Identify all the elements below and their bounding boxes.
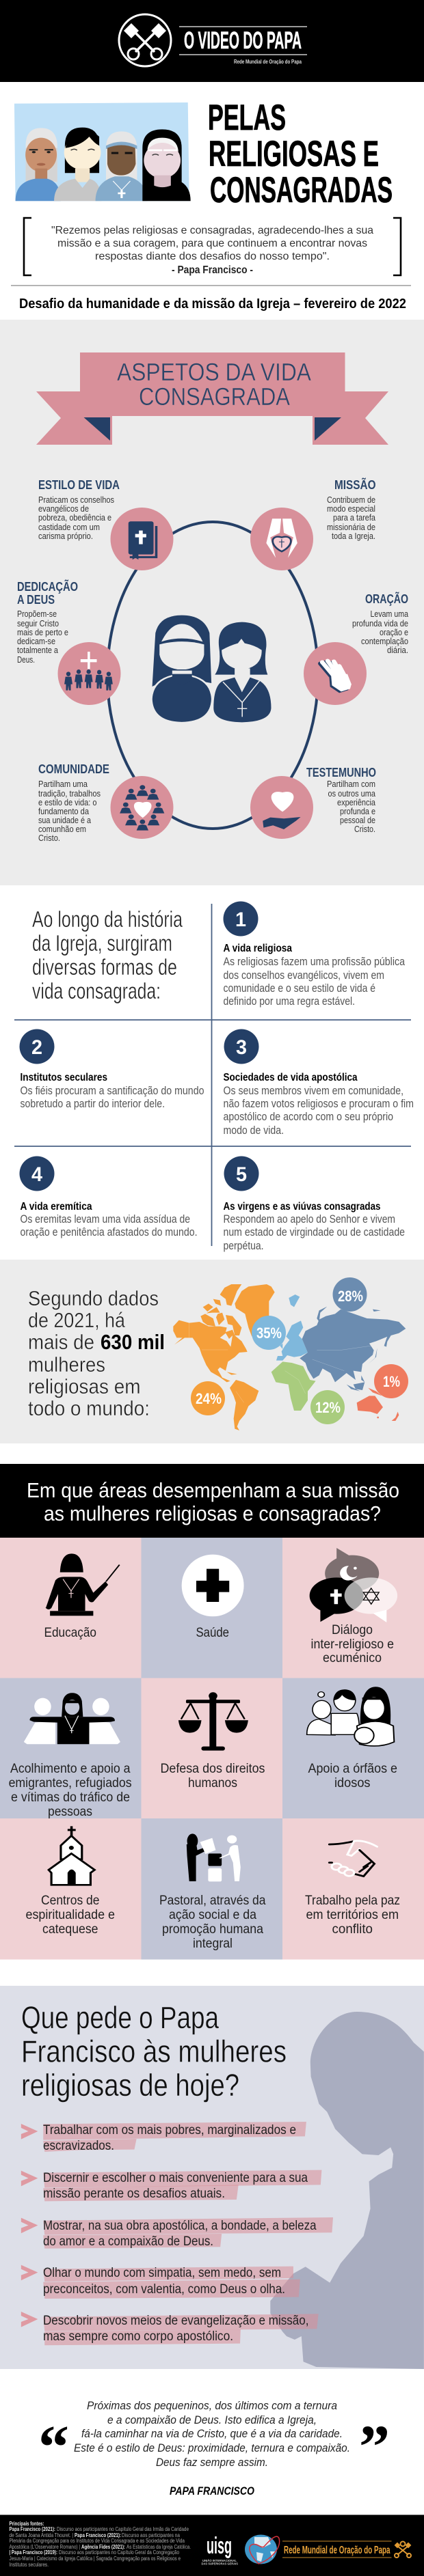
label: orfaos: Apoio a órfãos e <box>308 1762 397 1776</box>
label: espiritualidade <box>26 1894 115 1937</box>
icon: saude <box>182 1555 244 1616</box>
aspect: testemunho: Partilham com <box>327 779 375 789</box>
logo: UISG <box>201 2533 238 2566</box>
list of requests <box>43 2123 317 2344</box>
label: acolhimento: pessoas <box>48 1805 92 1819</box>
form 1: comunidade e o seu estilo de vida é <box>223 982 375 995</box>
aspect: estilo de vida: pobreza, obediência e <box>38 513 111 523</box>
form 5: Respondem ao apelo do Senhor e vivem <box>223 1213 395 1225</box>
label: orfaos <box>308 1762 397 1790</box>
logo: UISG: DAS SUPERIORAS GERAIS <box>201 2562 238 2566</box>
aspect: comunidade: COMUNIDADE <box>38 762 109 776</box>
form 1 <box>223 902 406 1008</box>
label: acolhimento <box>9 1762 132 1819</box>
label: paz <box>305 1894 400 1937</box>
icon: acolhimento <box>24 1693 120 1744</box>
aspect: comunidade: sua unidade é a <box>38 816 91 825</box>
form 1: dos conselhos evangélicos, vivem em <box>223 969 384 982</box>
form 2: 2 <box>31 1036 42 1059</box>
aspect: estilo de vida: ESTILO DE VIDA <box>38 477 120 492</box>
banner <box>36 352 388 445</box>
form 1: definido por uma regra estável. <box>223 995 355 1008</box>
intro text: Ao longo da história <box>32 906 183 932</box>
form 2: Os fiéis procuram a santificação do mundo <box>21 1085 204 1097</box>
label: pastoral <box>159 1894 266 1951</box>
form 3: apostólico de acordo com o seu próprio <box>223 1111 393 1123</box>
statistic text: 630 mil <box>101 1330 165 1354</box>
label: dialogo: ecuménico <box>323 1651 382 1665</box>
quote in brackets <box>24 218 401 276</box>
aspect: estilo de vida: Praticam os conselhos <box>38 495 114 505</box>
label: pastoral: Pastoral, através da <box>159 1894 266 1908</box>
sources: Jesus-Maria | Catecismo da Igreja Católica | Sagrada Congregação para os Religiosos e <box>10 2556 181 2562</box>
form 4: A vida eremítica <box>21 1201 92 1213</box>
icon: balanca <box>178 1692 248 1751</box>
closing quote: PAPA FRANCISCO <box>170 2484 254 2497</box>
aspect: estilo de vida: castidade com um <box>38 523 100 532</box>
heading band: areas de missao <box>0 1464 424 1538</box>
title: PELAS <box>208 98 286 138</box>
form 5: As virgens e as viúvas consagradas <box>223 1201 381 1213</box>
sources: Plenária da Congregação para os Institutos de Vida Consagrada e as Sociedades de Vida <box>10 2538 185 2544</box>
aspect: estilo de vida: evangélicos de <box>38 504 89 514</box>
label: saude: Saúde <box>196 1626 229 1640</box>
form 3: modo de vida. <box>223 1124 284 1137</box>
aspect: testemunho: os outros uma <box>328 789 375 799</box>
ring connecting aspects <box>107 522 318 829</box>
closing quote: Próximas dos pequeninos, dos últimos com a ternura <box>87 2399 337 2412</box>
list of requests: Descobrir novos meios de evangelização e missão, <box>43 2314 309 2328</box>
icon: two women centre <box>151 615 271 723</box>
label: paz: conflito <box>332 1922 373 1937</box>
footer <box>0 2515 424 2576</box>
label: paz: Trabalho pela paz <box>305 1894 400 1908</box>
map percentages: 24% <box>196 1390 222 1407</box>
label: orfaos: idosos <box>334 1776 371 1790</box>
aspect: oracao: oração e <box>380 628 408 637</box>
aspect: testemunho: Cristo. <box>354 825 375 834</box>
closing quote: e a compaixão de Deus. Isto edifica a Igreja, <box>107 2413 317 2426</box>
statistic text: religiosas em <box>28 1374 141 1398</box>
label: pastoral: integral <box>193 1937 233 1951</box>
aspect: dedicacao a Deus: A DEUS <box>17 592 55 607</box>
aspect: dedicacao a Deus: totalmente a <box>17 646 58 655</box>
label: direitos humanos: humanos <box>188 1776 237 1790</box>
aspect: dedicacao a Deus: DEDICAÇÃO <box>17 579 78 594</box>
logo: rede mundial <box>282 2541 411 2558</box>
label: dialogo <box>310 1623 394 1665</box>
quote in brackets: respostas diante dos desafios do nosso tempo". <box>95 251 330 262</box>
sources: Papa Francisco (2021): <box>75 2532 121 2538</box>
label: espiritualidade: catequese <box>42 1922 98 1937</box>
list of requests: escravizados. <box>43 2139 114 2153</box>
icon: dialogo inter-religioso <box>310 1548 397 1622</box>
aspect: dedicacao a Deus: seguir Cristo <box>17 619 59 628</box>
closing quote: Deus faz sempre assim. <box>156 2456 268 2469</box>
form 4: Os eremitas levam uma vida assídua de <box>21 1213 190 1225</box>
sources <box>10 2521 191 2568</box>
heading: religiosas de hoje? <box>21 2068 239 2103</box>
sources: Papa Francisco (2021): <box>10 2526 55 2532</box>
icon: pastoral <box>187 1833 241 1881</box>
aspect: missao: MISSÃO <box>334 477 376 492</box>
aspect: testemunho: profunda e <box>340 807 375 816</box>
aspect: oracao: profunda vida de <box>352 619 408 628</box>
aspect: oracao: ORAÇÃO <box>365 592 408 606</box>
sources: de Santa Joana Antida Thouret. | <box>10 2532 73 2538</box>
icon: igreja <box>49 1826 94 1885</box>
heading band: areas de missao: as mulheres religiosas e consagradas? <box>44 1501 381 1525</box>
form 2: sobretudo a partir do interior dele. <box>21 1098 165 1110</box>
aspect: dedicacao a Deus: mais de perto e <box>17 628 68 637</box>
statistic text: de 2021, há <box>28 1308 126 1332</box>
closing quote: fá-la caminhar na via de Cristo, que é a via da caridade. <box>81 2427 343 2440</box>
aspect: missao: modo especial <box>327 504 375 514</box>
label: acolhimento: Acolhimento e apoio a <box>10 1762 131 1776</box>
aspect: comunidade: Cristo. <box>38 833 60 843</box>
quote marks: ” <box>359 2413 390 2481</box>
list of requests: preconceitos, com valentia, como Deus o olha. <box>43 2282 285 2297</box>
label: dialogo: Diálogo <box>332 1623 373 1637</box>
aspect: oracao: contemplação <box>361 637 408 646</box>
aspect: dedicacao a Deus: dedicam-se <box>17 637 55 646</box>
form 1: A vida religiosa <box>223 943 292 954</box>
icon: aperto de maos <box>329 1841 377 1876</box>
aspect: missao: Contribuem de <box>327 495 375 505</box>
intro text: vida consagrada: <box>32 978 161 1003</box>
heading band: areas de missao: Em que áreas desempenham a sua missão <box>27 1478 399 1502</box>
closing quote <box>38 2399 390 2497</box>
aspect: comunidade: tradição, trabalhos <box>38 789 101 799</box>
label: direitos humanos: Defesa dos direitos <box>160 1762 265 1776</box>
aspect: comunidade <box>38 762 174 843</box>
form 2 <box>19 1029 204 1110</box>
map percentages: 1% <box>383 1373 400 1390</box>
statistic text <box>28 1286 165 1420</box>
aspect: comunidade: e estilo de vida: o <box>38 798 97 807</box>
quote marks <box>38 2413 390 2481</box>
list of requests: mas sempre como corpo apostólico. <box>43 2329 233 2344</box>
form 4: oração e penitência afastados do mundo. <box>21 1226 197 1238</box>
aspect: missao: para a tarefa <box>333 513 375 523</box>
panel: grid of mission areas <box>0 1538 424 1959</box>
sources: | Papa Francisco (2019): <box>10 2549 57 2556</box>
wordmark: Rede Mundial de Oração do Papa <box>234 59 302 65</box>
list of requests: Mostrar, na sua obra apostólica, a bondade, a beleza <box>43 2219 317 2233</box>
panel: formas de vida consagrada <box>14 902 414 1252</box>
statistic text: todo o mundo: <box>28 1396 150 1420</box>
aspect: testemunho: experiência <box>337 798 375 807</box>
sources: Institutos seculares. <box>10 2562 49 2568</box>
wordmark <box>179 27 307 65</box>
form 4: 4 <box>31 1163 42 1186</box>
title <box>208 98 393 210</box>
quote in brackets: "Rezemos pelas religiosas e consagradas, agradecendo-lhes a sua <box>51 225 373 236</box>
logo: globe with heart <box>245 2534 280 2564</box>
logo: UISG: uisg <box>207 2533 232 2559</box>
world map <box>173 1284 406 1430</box>
list of requests: missão perante os desafios atuais. <box>43 2187 225 2201</box>
form 2: Institutos seculares <box>21 1072 107 1083</box>
aspect: oracao: Levam uma <box>371 609 408 619</box>
map percentages <box>191 1277 408 1424</box>
sources: Apostólica (L'Osservatore Romano) | <box>10 2544 80 2550</box>
label: espiritualidade: Centros de <box>41 1894 100 1908</box>
aspect: comunidade: Partilham uma <box>38 779 88 789</box>
sources: Discurso aos participantes na <box>122 2532 180 2538</box>
header band <box>0 0 424 82</box>
icon: orfaos e idosos <box>307 1687 394 1746</box>
aspect: estilo de vida: carisma próprio. <box>38 531 93 541</box>
form 3: 3 <box>236 1036 247 1059</box>
aspect: oracao <box>304 592 408 705</box>
statistic text: mais de <box>28 1330 94 1354</box>
intro text: da Igreja, surgiram <box>32 930 172 956</box>
aspect: estilo de vida <box>38 477 174 570</box>
aspect: missao <box>250 477 376 570</box>
panel: statistics map <box>0 1260 424 1443</box>
heading: Francisco às mulheres <box>21 2034 287 2068</box>
map percentages: 28% <box>338 1288 363 1305</box>
statistic text: Segundo dados <box>28 1286 159 1310</box>
aspect: comunidade: comunhão em <box>38 825 86 834</box>
form 5 <box>223 1156 405 1252</box>
label: direitos humanos <box>160 1762 265 1790</box>
aspect: testemunho: TESTEMUNHO <box>306 765 376 779</box>
aspect: comunidade: fundamento da <box>38 807 89 816</box>
intro text: diversas formas de <box>32 954 177 980</box>
label: dialogo: inter-religioso e <box>310 1637 394 1652</box>
quote marks: “ <box>38 2413 69 2481</box>
label: pastoral: ação social e da <box>169 1908 256 1922</box>
silhouette of Pope <box>270 2012 424 2369</box>
form 5: 5 <box>236 1163 247 1186</box>
sources: Principais fontes: <box>10 2521 44 2527</box>
banner: ASPETOS DA VIDA <box>117 358 311 386</box>
aspect: testemunho: pessoal de <box>340 816 375 825</box>
highlights and chevrons <box>21 2122 333 2345</box>
form 1: 1 <box>235 909 246 931</box>
list of requests: Trabalhar com os mais pobres, marginalizados e <box>43 2123 296 2137</box>
label: educacao: Educação <box>44 1626 96 1640</box>
logo: crossed keys <box>119 14 171 66</box>
label: espiritualidade: espiritualidade e <box>26 1908 115 1922</box>
statistic text: mulheres <box>28 1353 105 1376</box>
aspect: oracao: diária. <box>387 646 408 655</box>
list of requests: Discernir e escolher o mais conveniente para a sua <box>43 2171 308 2185</box>
form 3: Sociedades de vida apostólica <box>223 1072 358 1083</box>
illustration: four women <box>14 102 191 201</box>
aspect: missao: toda a Igreja. <box>332 531 375 541</box>
map percentages: 35% <box>256 1325 282 1342</box>
aspect: dedicacao a Deus: Propõem-se <box>17 609 57 619</box>
panel: aspetos da vida consagrada <box>0 320 424 885</box>
sources: Discurso aos participantes no Capítulo Geral da Congregação <box>59 2549 179 2556</box>
form 5: perpétua. <box>223 1240 264 1252</box>
sources: Agência Fides (2021): <box>81 2544 125 2550</box>
aspect: missao: missionária de <box>327 523 375 532</box>
closing quote: Este é o estilo de Deus: proximidade, ternura e compaixão. <box>74 2441 350 2454</box>
list of requests: Olhar o mundo com simpatia, sem medo, sem <box>43 2266 281 2280</box>
heading <box>21 2000 287 2103</box>
quote in brackets: missão e a sua coragem, para que continuem a encontrar novas <box>57 238 367 249</box>
list of requests: do amor e a compaixão de Deus. <box>43 2234 213 2249</box>
wordmark: O VIDEO DO PAPA <box>184 27 302 54</box>
icon: educacao <box>45 1553 120 1616</box>
sources: Discurso aos participantes no Capítulo Geral das Irmãs da Caridade <box>57 2526 189 2532</box>
intro text <box>32 906 183 1003</box>
form 3 <box>223 1029 414 1137</box>
aspect: dedicacao a Deus <box>17 579 120 705</box>
map percentages: 12% <box>315 1399 341 1416</box>
sources: As Estatísticas da Igreja Católica. <box>127 2544 191 2550</box>
quote in brackets: - Papa Francisco - <box>172 264 253 276</box>
aspect: dedicacao a Deus: Deus. <box>17 655 35 665</box>
label: acolhimento: e vítimas do tráfico de <box>11 1790 130 1805</box>
heading: Que pede o Papa <box>21 2000 220 2035</box>
banner: CONSAGRADA <box>139 383 290 411</box>
logo: UISG: UNIÃO INTERNACIONAL <box>202 2558 237 2562</box>
label: acolhimento: emigrantes, refugiados <box>9 1776 132 1790</box>
label: paz: em territórios em <box>306 1908 399 1922</box>
aspect: testemunho <box>250 765 376 839</box>
form 4 <box>19 1156 197 1238</box>
label: pastoral: promoção humana <box>162 1922 263 1937</box>
panel: que pede o Papa <box>0 1986 424 2369</box>
